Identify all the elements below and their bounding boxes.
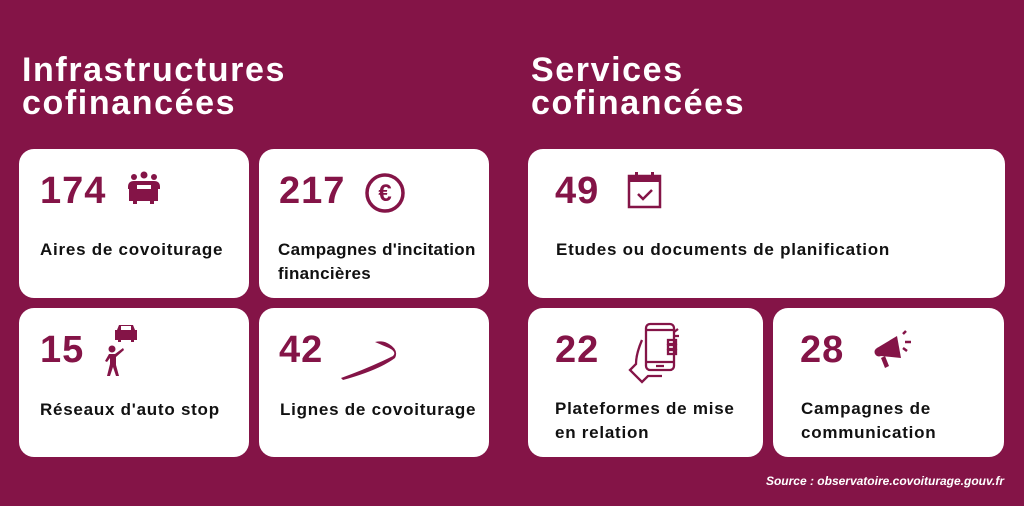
card: auto stop bbox=[19, 308, 249, 457]
icon: calendar bbox=[628, 172, 662, 208]
label bbox=[801, 399, 936, 442]
icon: megaphone bbox=[874, 330, 911, 368]
icon: euro bbox=[365, 173, 405, 213]
label: Plateformes de mise bbox=[555, 399, 735, 418]
icon: euro: € bbox=[378, 180, 392, 207]
number: 15 bbox=[40, 329, 84, 371]
source: Source : observatoire.covoiturage.gouv.fr bbox=[766, 474, 1004, 488]
card: aires bbox=[19, 149, 249, 298]
card: communication bbox=[773, 308, 1004, 457]
label: Etudes ou documents de planification bbox=[556, 240, 890, 259]
icon: carpool bbox=[128, 172, 160, 204]
number: 22 bbox=[555, 329, 599, 371]
card: etudes bbox=[528, 149, 1005, 298]
label bbox=[555, 399, 735, 442]
icon: phone hand bbox=[628, 322, 679, 384]
label: communication bbox=[801, 423, 936, 442]
title: infrastructures: Infrastructures bbox=[22, 51, 286, 89]
title: infrastructures: cofinancées bbox=[22, 84, 236, 122]
title: infrastructures bbox=[22, 51, 286, 122]
number: 49 bbox=[555, 170, 599, 212]
card: plateformes bbox=[528, 308, 763, 457]
icon: hitchhiker bbox=[105, 325, 137, 376]
label: Campagnes de bbox=[801, 399, 931, 418]
title: services bbox=[531, 51, 745, 122]
label: Lignes de covoiturage bbox=[280, 400, 476, 419]
label bbox=[278, 240, 476, 283]
number: 42 bbox=[279, 329, 323, 371]
card: campagnes incitation bbox=[259, 149, 489, 298]
label: Aires de covoiturage bbox=[40, 240, 223, 259]
number: 217 bbox=[279, 170, 345, 212]
label: financières bbox=[278, 264, 371, 283]
title: services: cofinancées bbox=[531, 84, 745, 122]
label: Réseaux d'auto stop bbox=[40, 400, 220, 419]
number: 174 bbox=[40, 170, 106, 212]
icon: road line bbox=[341, 341, 396, 380]
card: lignes bbox=[259, 308, 489, 457]
label: Campagnes d'incitation bbox=[278, 240, 476, 259]
number: 28 bbox=[800, 329, 844, 371]
label: en relation bbox=[555, 423, 649, 442]
title: services: Services bbox=[531, 51, 684, 89]
